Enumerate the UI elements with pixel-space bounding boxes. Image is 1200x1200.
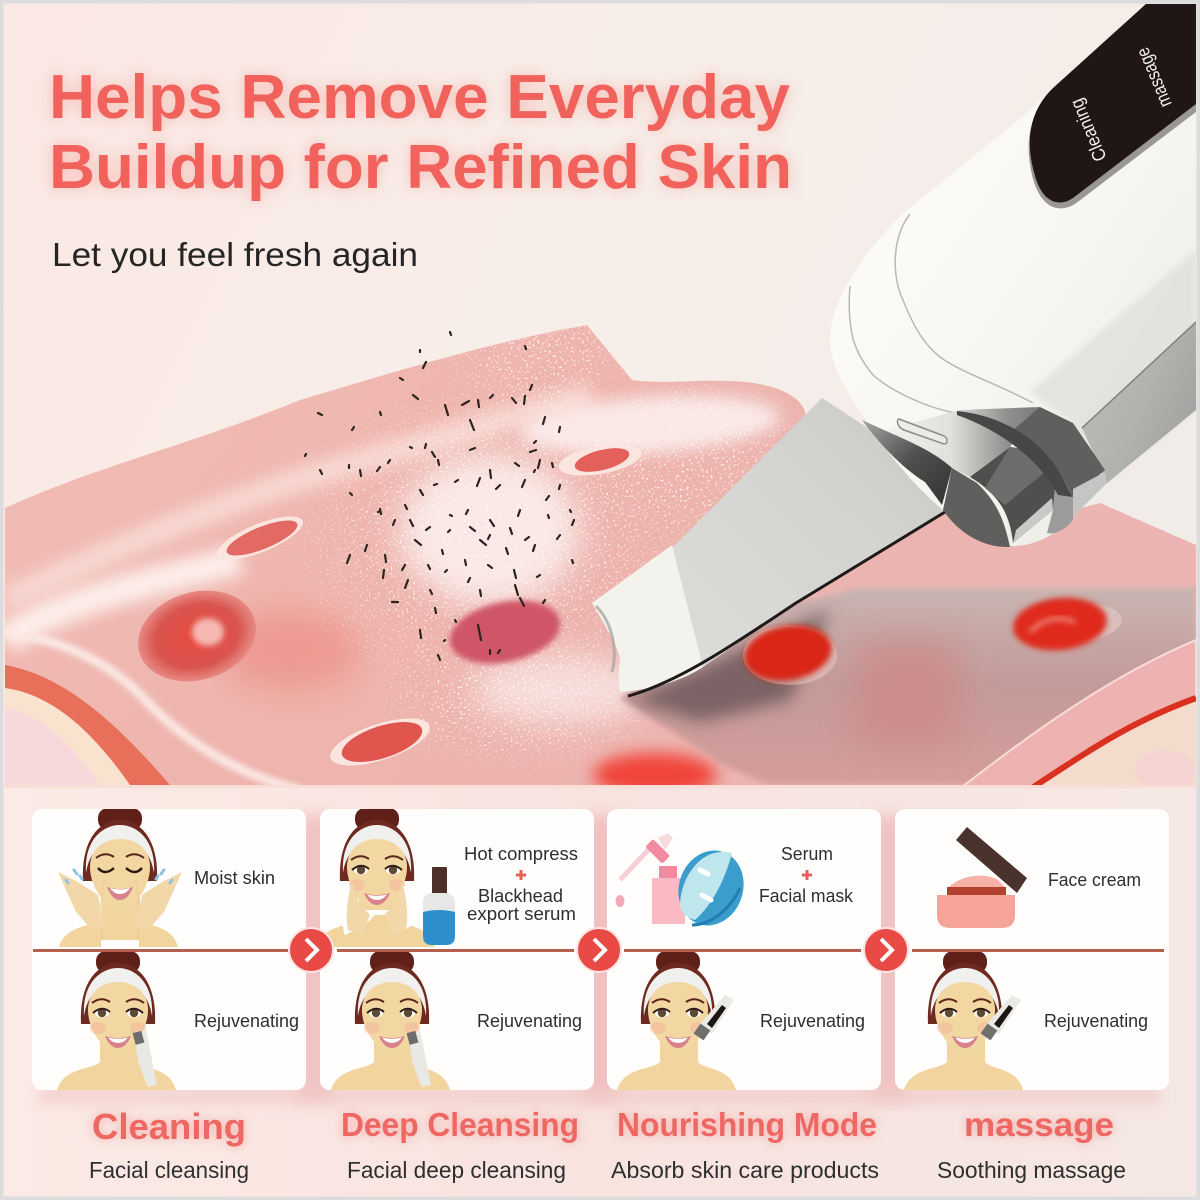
card 2: deep cleansing: export serum [467,904,576,924]
divider [337,949,574,952]
card 4: massage [895,809,1169,1090]
caption: nourishing mode: Absorb skin care products [611,1157,879,1183]
dark blackhead particles [305,332,574,660]
card 2: deep cleansing: Hot compress [464,844,578,864]
blade cast shadow [620,588,1196,785]
card 4: massage: Face cream [1048,870,1141,890]
plus sign [802,870,812,880]
card 2: deep cleansing: Blackhead [478,886,563,906]
rejuvenating illustration [331,951,450,1090]
product photo: skin and device [0,3,1196,800]
device handle [830,3,1196,547]
card 3: nourishing mode: Serum [781,844,833,864]
heading: cleaning: Cleaning [92,1106,246,1147]
heading: nourishing mode: Nourishing Mode [617,1106,877,1143]
rejuvenating illustration [57,951,176,1090]
card 4: massage: Rejuvenating [1044,1011,1148,1031]
face cream jar [937,827,1027,928]
red pores under device [740,593,1124,687]
divider [33,949,288,952]
title [49,63,792,202]
skin pores [127,439,644,775]
card 1: cleaning [32,808,306,1090]
body lower metal panel [1033,255,1196,450]
display panel: massage [1133,44,1177,110]
bottom steps panel [4,785,1196,1196]
display panel: Cleaning [1066,95,1112,164]
rejuvenating illustration [617,951,736,1090]
facial mask [669,842,753,934]
skin left rim [5,632,300,790]
card 2: deep cleansing [316,808,594,1090]
card 1: cleaning: Rejuvenating [194,1011,299,1031]
hot compress illustration [316,808,435,947]
card 3: nourishing mode: Rejuvenating [760,1011,865,1031]
plus sign [516,870,526,880]
card 3: nourishing mode [607,809,881,1090]
divider [624,949,861,952]
caption: massage: Soothing massage [937,1157,1126,1183]
caption: deep cleansing: Facial deep cleansing [347,1157,566,1183]
heading: massage: massage [964,1106,1114,1143]
title: Buildup for Refined Skin [49,133,792,202]
skin right rim [958,640,1196,790]
mode slider [897,419,947,444]
arrow 1 [289,928,333,972]
white foam sparkles [287,325,801,769]
metal head band [862,407,1107,547]
face washing illustration [58,808,182,949]
card 2: deep cleansing: Rejuvenating [477,1011,582,1031]
caption: cleaning: Facial cleansing [89,1157,249,1183]
serum bottle [423,867,455,945]
dropper and bottle [616,833,685,924]
skin surface [5,325,1196,797]
heading: deep cleansing: Deep Cleansing [341,1106,579,1143]
divider [912,949,1164,952]
subtitle: Let you feel fresh again [52,236,418,273]
title: Helps Remove Everyday [49,63,791,132]
ultrasonic blade [592,398,945,696]
card 3: nourishing mode: Facial mask [759,886,854,906]
body seams [895,214,1033,403]
card 1: cleaning: Moist skin [194,868,275,888]
display panel [1029,3,1196,208]
rejuvenating illustration [904,951,1023,1090]
arrow 3 [864,928,908,972]
arrow 2 [577,928,621,972]
